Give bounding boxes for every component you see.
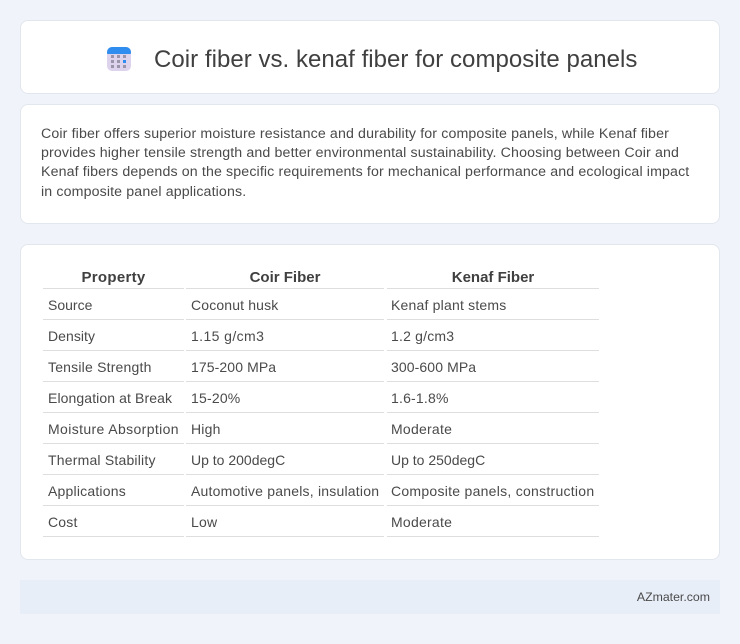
text block: summary <box>41 126 690 200</box>
row: tensile strength: 175-200 MPa <box>191 359 276 375</box>
row: density <box>48 328 454 344</box>
row: elongation at break: 1.6-1.8% <box>391 390 449 406</box>
row: elongation at break <box>48 390 449 406</box>
row: cost: Moderate <box>391 514 452 530</box>
row: applications: Composite panels, construction <box>391 483 594 499</box>
row: source: Source <box>48 297 92 313</box>
panel: title card <box>20 20 720 94</box>
row: source <box>48 297 506 313</box>
row: applications <box>48 483 594 499</box>
title: Coir fiber vs. kenaf fiber for composite panels <box>154 46 637 72</box>
row: source: Coconut husk <box>191 297 278 313</box>
table header: coir fiber: Coir Fiber <box>250 269 320 286</box>
panel: summary text <box>20 104 720 224</box>
footer bar <box>20 580 720 614</box>
row: moisture absorption: High <box>191 421 221 437</box>
row: source: Kenaf plant stems <box>391 297 506 313</box>
row: applications: Automotive panels, insulation <box>191 483 379 499</box>
table header: kenaf fiber: Kenaf Fiber <box>452 269 534 286</box>
row: thermal stability <box>48 452 485 468</box>
panel: comparison table <box>20 244 720 560</box>
table header: property: Property <box>81 269 146 286</box>
row: elongation at break: Elongation at Break <box>48 390 172 406</box>
row: density: Density <box>48 328 95 344</box>
row: thermal stability: Thermal Stability <box>48 452 156 468</box>
row: cost: Low <box>191 514 217 530</box>
row: cost: Cost <box>48 514 78 530</box>
row: moisture absorption <box>48 421 452 437</box>
row: density: 1.2 g/cm3 <box>391 328 454 344</box>
text block: summary: provides higher tensile strength and better environmental sustainability. Choosing between Coir and <box>41 145 679 161</box>
row: applications: Applications <box>48 483 126 499</box>
row: tensile strength <box>48 359 476 375</box>
row: moisture absorption: Moderate <box>391 421 452 437</box>
row: thermal stability: Up to 200degC <box>191 452 285 468</box>
row: tensile strength: 300-600 MPa <box>391 359 476 375</box>
text block: summary: Kenaf fibers depends on the specific requirements for mechanical performance and ecological impact <box>41 164 689 180</box>
icon: calendar <box>107 47 131 71</box>
row: thermal stability: Up to 250degC <box>391 452 485 468</box>
row: cost <box>48 514 452 530</box>
row: moisture absorption: Moisture Absorption <box>48 421 179 437</box>
footer text: AZmater.com: AZmater.com <box>637 590 710 604</box>
row: tensile strength: Tensile Strength <box>48 359 152 375</box>
text block: summary: Coir fiber offers superior moisture resistance and durability for composite panels, while Kenaf fiber <box>41 126 669 142</box>
text block: summary: in composite panel applications. <box>41 184 246 200</box>
row: elongation at break: 15-20% <box>191 390 240 406</box>
row: density: 1.15 g/cm3 <box>191 328 264 344</box>
